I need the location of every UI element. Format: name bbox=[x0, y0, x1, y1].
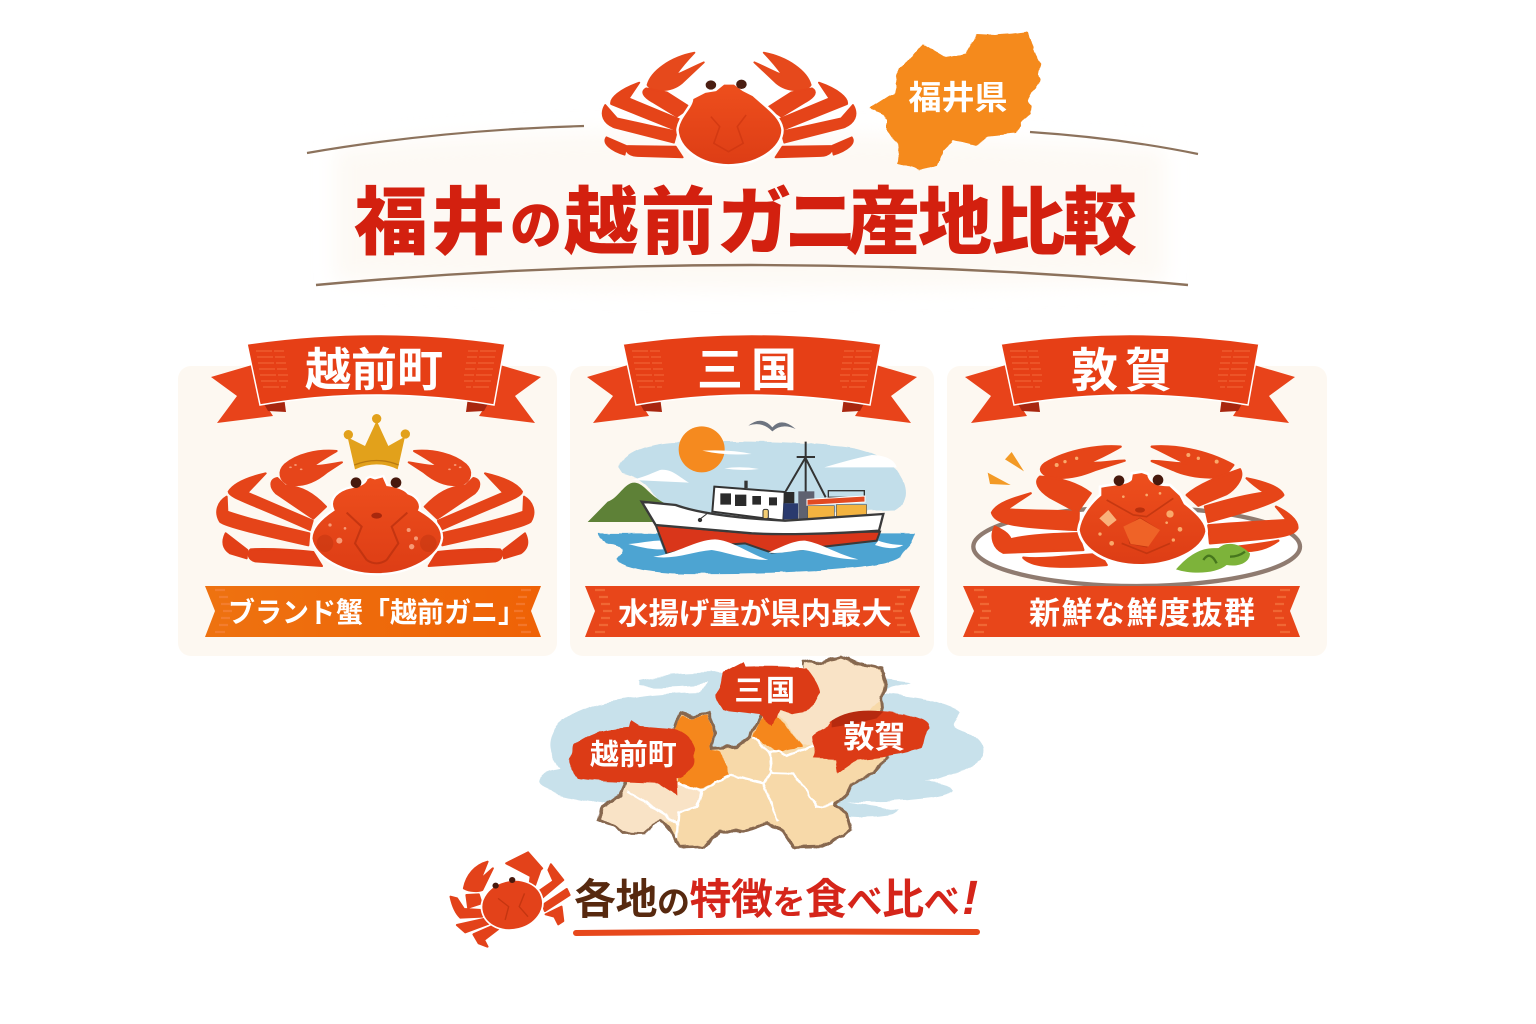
ribbon heading bbox=[587, 334, 917, 423]
left arm bbox=[1037, 477, 1091, 512]
cargo stripe bbox=[807, 496, 865, 505]
title text: ニ bbox=[784, 181, 858, 264]
cargo hatch bbox=[828, 491, 864, 497]
wasabi shading bbox=[1203, 552, 1245, 563]
claw speckles bbox=[1055, 453, 1219, 467]
eyes bbox=[1114, 475, 1124, 486]
prefecture regions bbox=[598, 657, 887, 847]
caption banner bbox=[585, 586, 920, 637]
body bbox=[1078, 472, 1207, 565]
panel: 三国 bbox=[570, 334, 934, 656]
prefecture label: 福井県 bbox=[908, 79, 1008, 116]
illustration: fishing boat scene bbox=[588, 421, 915, 574]
caption banner: 新鮮な鮮度抜群 bbox=[1029, 596, 1255, 631]
map: Fukui production regions bbox=[538, 657, 984, 847]
title curved rule top right bbox=[1030, 132, 1198, 154]
title cream band bbox=[335, 132, 1165, 289]
sparkles bbox=[988, 452, 1024, 485]
icon: seagull bbox=[748, 421, 796, 431]
title text: 産 bbox=[846, 181, 920, 264]
title text: 比 bbox=[991, 181, 1065, 264]
boat hull upper bbox=[642, 502, 883, 534]
cloud streaks bbox=[702, 450, 759, 470]
callout: 敦賀: 敦賀 bbox=[843, 720, 905, 755]
caption banner: 水揚げ量が県内最大 bbox=[618, 597, 892, 631]
orange region: Echizen bbox=[674, 715, 728, 789]
right claw bbox=[1152, 446, 1233, 477]
sea wash bbox=[538, 673, 984, 817]
crab limbs bbox=[992, 446, 1297, 567]
right legs bbox=[1205, 478, 1297, 551]
ribbon heading: 三国 bbox=[697, 344, 805, 396]
waves bbox=[628, 539, 903, 560]
icon: crown bbox=[344, 414, 410, 469]
shell highlights bbox=[1099, 510, 1117, 527]
title block bbox=[307, 126, 1198, 289]
island bbox=[588, 483, 665, 522]
title text: 地 bbox=[918, 181, 992, 264]
title text: 較 bbox=[1063, 181, 1137, 264]
title curved rule top left bbox=[307, 126, 584, 153]
ribbon heading: 越前町 bbox=[305, 344, 443, 396]
ribbon heading bbox=[965, 334, 1295, 423]
icon: Fukui prefecture map bbox=[869, 32, 1041, 170]
illustration: plated crab bbox=[973, 446, 1300, 586]
left legs bbox=[992, 493, 1107, 567]
title text: 越 bbox=[564, 181, 638, 264]
boat cabin bbox=[712, 487, 785, 521]
callout: 越前町 bbox=[569, 721, 695, 796]
cabin windows bbox=[720, 493, 777, 506]
cloud bbox=[824, 455, 897, 467]
callout: 三国: 三国 bbox=[734, 676, 798, 708]
tagline underline bbox=[576, 932, 977, 933]
wheelhouse bbox=[784, 492, 794, 503]
tagline text: 各地の特徴を食べ比べ! bbox=[574, 872, 978, 925]
left claw bbox=[1041, 446, 1125, 478]
panel: 敦賀 bbox=[947, 334, 1327, 656]
mast bbox=[786, 442, 826, 497]
region borders bbox=[627, 737, 834, 838]
pale northern region bbox=[778, 658, 884, 747]
icon: header crab bbox=[603, 53, 856, 165]
card background bbox=[570, 366, 934, 656]
title text: 福 bbox=[354, 181, 428, 264]
pale western region bbox=[600, 782, 702, 833]
orange region: Mikuni bbox=[753, 713, 803, 752]
card background bbox=[947, 366, 1327, 656]
ribbon heading bbox=[211, 334, 541, 423]
blue crate bbox=[783, 503, 798, 519]
callout: 三国 bbox=[716, 662, 820, 726]
shell plates bbox=[1107, 498, 1173, 553]
title text: ガ bbox=[717, 181, 791, 264]
icon: crowned crab bbox=[217, 414, 533, 574]
map base bbox=[598, 657, 887, 847]
engine block bbox=[798, 491, 814, 520]
cabin stack bbox=[744, 481, 748, 488]
sea bbox=[598, 533, 915, 574]
title curved rule bottom bbox=[316, 265, 1188, 285]
boat hull lower bbox=[656, 525, 880, 554]
title text: 前 bbox=[641, 181, 715, 264]
cloud bbox=[632, 470, 689, 483]
closing tagline bbox=[451, 852, 978, 947]
caption banner bbox=[963, 586, 1300, 637]
caption banner: ブランド蟹「越前ガニ」 bbox=[228, 596, 525, 628]
cargo boxes bbox=[808, 505, 867, 519]
callout: 越前町: 越前町 bbox=[590, 739, 677, 772]
caption banner bbox=[205, 586, 541, 637]
sun bbox=[679, 426, 725, 472]
sky wash bbox=[618, 442, 905, 517]
panel: 越前町 bbox=[178, 334, 557, 656]
icon: wasabi leaves bbox=[1176, 544, 1250, 573]
title text: 井 bbox=[431, 181, 505, 264]
plate bbox=[973, 507, 1300, 586]
title text: の bbox=[510, 198, 562, 256]
anchor bbox=[698, 514, 707, 522]
callout: 敦賀 bbox=[812, 711, 930, 774]
ribbon heading: 敦賀 bbox=[1071, 344, 1179, 397]
right arm bbox=[1187, 469, 1241, 506]
cabin door bbox=[763, 509, 768, 519]
card background bbox=[178, 366, 557, 656]
icon: small crab bbox=[451, 852, 570, 947]
